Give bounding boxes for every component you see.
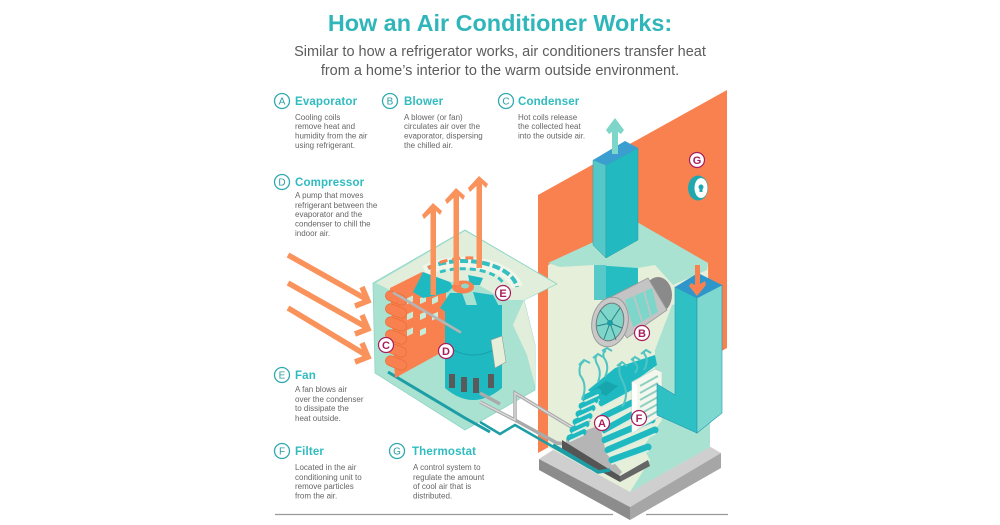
legend: compressor: A pump that moves [295, 191, 363, 200]
arrows: air entering condenser [288, 255, 368, 362]
legend: thermostat: of cool air that is [413, 482, 471, 491]
legend: evaporator [274, 94, 368, 150]
legend: condenser: Hot coils release [518, 113, 578, 122]
marker E: E [499, 288, 507, 300]
legend: blower: B [387, 96, 394, 108]
legend: evaporator: Cooling coils [295, 113, 340, 122]
marker A [594, 416, 610, 430]
legend: filter: remove particles [295, 482, 354, 491]
marker C: C [382, 340, 390, 352]
legend: fan: A fan blows air [295, 385, 347, 394]
legend: compressor: evaporator and the [295, 210, 363, 219]
legend: blower: the chilled air. [404, 141, 453, 150]
legend: blower: A blower (or fan) [404, 113, 463, 122]
subtitle: from a home’s interior to the warm outside environment. [321, 63, 679, 79]
legend: fan: over the condenser [295, 395, 364, 404]
legend: blower: evaporator, dispersing [404, 132, 483, 140]
legend: thermostat: distributed. [413, 492, 452, 500]
condenser coil [384, 272, 446, 378]
legend: filter: F [279, 446, 285, 458]
marker D: D [442, 346, 450, 358]
legend: evaporator: using refrigerant. [295, 141, 355, 150]
legend: filter: Located in the air [295, 463, 357, 472]
marker G [690, 152, 704, 168]
legend: blower: circulates air over the [404, 122, 481, 131]
subtitle [294, 44, 706, 79]
legend: blower: Blower [404, 96, 444, 108]
legend: thermostat: G [393, 446, 401, 458]
marker B [634, 326, 650, 340]
marker E [496, 286, 510, 300]
legend: evaporator: humidity from the air [295, 132, 368, 140]
legend: fan: to dissipate the [295, 404, 349, 413]
blower [587, 277, 672, 350]
return duct with arrow [657, 265, 722, 433]
legend: condenser [498, 94, 585, 140]
refrigerant pipes [480, 393, 590, 468]
marker B: B [638, 328, 646, 340]
legend: compressor: indoor air. [295, 229, 330, 238]
house wall [538, 90, 727, 453]
fan grille and blades [413, 258, 517, 317]
legend: blower [382, 94, 483, 150]
legend: fan [274, 368, 364, 423]
air flow arrows [579, 348, 651, 407]
legend: compressor: condenser to chill the [295, 220, 371, 228]
marker F [632, 410, 646, 426]
filter [632, 369, 662, 433]
legend: thermostat [390, 444, 485, 500]
legend: evaporator: Evaporator [295, 96, 358, 108]
legend: filter: Filter [295, 446, 324, 458]
legend: compressor: refrigerant between the [295, 201, 378, 210]
base platform [539, 400, 721, 520]
legend: fan: Fan [295, 370, 316, 382]
subtitle: Similar to how a refrigerator works, air conditioners transfer heat [294, 44, 706, 60]
gray pipe across coil [394, 293, 460, 332]
arrows: hot air rising [422, 176, 488, 295]
evaporator coil [553, 355, 657, 482]
marker G: G [693, 155, 701, 167]
legend: compressor: D [278, 178, 286, 188]
legend: thermostat: Thermostat [412, 446, 476, 458]
legend: fan: heat outside. [295, 414, 341, 423]
legend: compressor [274, 174, 378, 238]
legend: filter [274, 444, 362, 500]
indoor cabinet [548, 222, 710, 492]
marker D [438, 344, 454, 358]
marker C [378, 338, 394, 352]
compressor [445, 305, 506, 400]
markers [378, 152, 704, 430]
legend: evaporator: A [279, 96, 286, 108]
legend: filter: from the air. [295, 492, 337, 500]
legend: thermostat: regulate the amount [413, 473, 485, 482]
legend: thermostat: A control system to [413, 463, 481, 472]
legend: condenser: the collected heat [518, 122, 581, 131]
outdoor unit housing [373, 230, 557, 432]
marker F: F [636, 413, 643, 425]
thermostat [688, 176, 708, 200]
supply duct with arrow [593, 118, 638, 258]
legend: condenser: Condenser [518, 96, 580, 108]
legend: condenser: into the outside air. [518, 132, 585, 140]
title: How an Air Conditioner Works: [328, 10, 672, 36]
marker A: A [598, 418, 606, 430]
legend: condenser: C [502, 96, 510, 108]
legend: fan: E [279, 370, 286, 382]
legend: evaporator: remove heat and [295, 122, 355, 131]
legend: filter: conditioning unit to [295, 473, 362, 482]
legend: compressor: Compressor [295, 177, 365, 189]
